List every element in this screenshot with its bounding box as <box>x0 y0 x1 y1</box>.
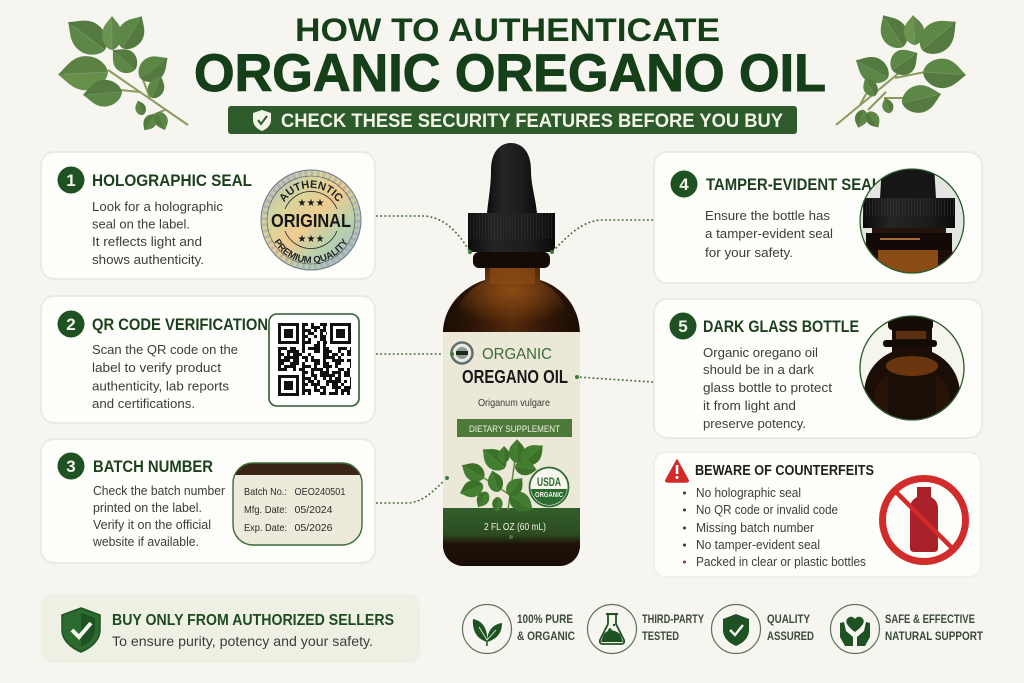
image: dark bottle close-up <box>860 315 964 425</box>
QR code <box>269 314 359 406</box>
dietary supplement band <box>457 419 572 437</box>
icon: holographic seal: ★★★ <box>298 234 324 245</box>
label: OREGANO OIL <box>462 367 568 387</box>
icon: holographic seal: AUTHENTIC <box>280 180 342 202</box>
badge: safe and effective natural support <box>830 604 983 654</box>
description: a tamper-evident seal <box>705 226 833 241</box>
badge: third-party tested <box>588 604 704 654</box>
badge: third-party tested: TESTED <box>642 631 679 643</box>
bottle body <box>443 268 580 566</box>
number 2 <box>58 310 84 338</box>
warning list: No tamper-evident seal <box>696 538 820 552</box>
image: cap close-up <box>860 165 964 275</box>
description <box>705 208 833 260</box>
title <box>194 12 826 103</box>
heading: BUY ONLY FROM AUTHORIZED SELLERS <box>112 612 394 629</box>
description: Look for a holographic <box>92 199 223 214</box>
USDA organic badge <box>530 468 568 506</box>
icon: holographic seal <box>260 170 362 270</box>
panel: buy only from authorized sellers <box>41 594 420 663</box>
dropper cap <box>468 213 555 252</box>
badge: third-party tested: THIRD-PARTY <box>642 614 704 626</box>
badge: 100% pure & organic <box>462 604 575 654</box>
panel: tamper-evident seal <box>654 152 982 283</box>
warning list: Packed in clear or plastic bottles <box>696 555 866 569</box>
panel: holographic seal <box>40 151 376 280</box>
description: It reflects light and <box>92 234 202 249</box>
right oregano sprig <box>836 9 967 131</box>
heading: DARK GLASS BOTTLE <box>703 317 859 336</box>
title: HOW TO AUTHENTICATE <box>295 12 720 48</box>
description: Scan the QR code on the <box>92 342 238 357</box>
label <box>443 332 580 518</box>
icon: holographic seal: PREMIUM QUALITY <box>274 238 347 264</box>
number 3: 3 <box>66 457 76 476</box>
icon: holographic seal: ★★★ <box>298 198 324 209</box>
description: Ensure the bottle has <box>705 208 831 223</box>
description: it from light and <box>703 398 796 413</box>
product bottle <box>443 143 580 566</box>
badge: 100% pure & organic: 100% PURE <box>517 614 573 626</box>
description: and certifications. <box>92 396 195 411</box>
batch label: Exp. Date: <box>244 522 287 534</box>
panel: dark glass bottle <box>654 299 982 438</box>
batch label: 05/2026 <box>294 522 333 534</box>
description: shows authenticity. <box>92 252 204 267</box>
description: website if available. <box>92 534 199 549</box>
base band <box>443 508 580 566</box>
description: should be in a dark <box>703 362 814 377</box>
connector dots <box>445 250 579 539</box>
panel: batch number <box>41 439 375 563</box>
description: Organic oregano oil <box>703 345 818 360</box>
panel: QR code verification <box>41 296 375 423</box>
badge: quality assured <box>712 604 814 654</box>
label: ORGANIC <box>482 346 552 363</box>
description: authenticity, lab reports <box>92 378 230 394</box>
USDA organic badge: USDA <box>537 477 561 489</box>
number 4: 4 <box>679 175 689 194</box>
warning list: No QR code or invalid code <box>696 503 838 517</box>
dietary supplement band: DIETARY SUPPLEMENT <box>469 424 560 435</box>
description: printed on the label. <box>93 500 202 515</box>
warning list: No holographic seal <box>696 486 801 500</box>
description: glass bottle to protect <box>703 380 832 395</box>
subtitle banner <box>228 106 797 134</box>
description <box>703 345 832 431</box>
panel: beware of counterfeits <box>654 452 981 577</box>
number 1: 1 <box>66 171 76 190</box>
description: Verify it on the official <box>93 517 211 532</box>
heading: QR CODE VERIFICATION <box>92 315 268 334</box>
description: preserve potency. <box>703 416 806 431</box>
number 1 <box>58 166 84 194</box>
heading: BEWARE OF COUNTERFEITS <box>695 463 874 479</box>
batch label <box>233 463 362 545</box>
icon: shield <box>62 608 100 652</box>
badge: quality assured: QUALITY <box>767 614 810 626</box>
dropper bulb <box>487 143 537 213</box>
batch label: 05/2024 <box>294 504 333 516</box>
number 2: 2 <box>66 315 76 334</box>
description: label to verify product <box>92 360 221 375</box>
USDA organic badge: ORGANIC <box>535 492 563 499</box>
description: for your safety. <box>705 245 793 260</box>
subtitle banner: CHECK THESE SECURITY FEATURES BEFORE YOU BUY <box>281 111 783 132</box>
number 4 <box>670 170 698 198</box>
icon: warning triangle <box>666 460 688 482</box>
heading: HOLOGRAPHIC SEAL <box>92 171 252 190</box>
badge: safe and effective natural support: SAFE & EFFECTIVE <box>885 614 975 626</box>
icon: shield <box>723 614 749 646</box>
number 5: 5 <box>678 317 688 336</box>
icon: no plastic bottle <box>882 478 966 562</box>
description <box>92 199 223 267</box>
icon: hands and heart <box>840 617 870 646</box>
icon: leaves <box>473 619 502 646</box>
icon: banner shield <box>253 110 271 131</box>
number 3 <box>58 452 84 480</box>
icon: flask <box>600 614 624 644</box>
description: seal on the label. <box>92 216 190 232</box>
warning list <box>683 486 866 569</box>
label: Origanum vulgare <box>478 397 550 409</box>
connector lines <box>376 216 653 503</box>
badge: safe and effective natural support: NATURAL SUPPORT <box>885 631 983 643</box>
warning list: Missing batch number <box>696 521 814 535</box>
text: To ensure purity, potency and your safety. <box>112 633 373 649</box>
description <box>92 483 226 549</box>
emblem <box>452 342 472 364</box>
badge: 100% pure & organic: & ORGANIC <box>517 631 575 643</box>
neck ring <box>473 252 550 268</box>
batch label: OEO240501 <box>294 486 346 498</box>
heading: TAMPER-EVIDENT SEAL <box>706 175 881 194</box>
icon: holographic seal: ORIGINAL <box>271 211 351 231</box>
description: Check the batch number <box>93 483 226 498</box>
number 5 <box>670 312 696 340</box>
volume text: 2 FL OZ (60 mL) <box>484 521 546 533</box>
batch label: Mfg. Date: <box>244 504 287 516</box>
amber glow <box>449 268 574 332</box>
batch label: Batch No.: <box>244 486 287 498</box>
badge: quality assured: ASSURED <box>767 631 814 643</box>
title: ORGANIC OREGANO OIL <box>194 44 826 103</box>
oregano plant <box>457 438 549 518</box>
heading: BATCH NUMBER <box>93 457 213 476</box>
left oregano sprig <box>57 10 188 134</box>
description <box>92 342 238 411</box>
